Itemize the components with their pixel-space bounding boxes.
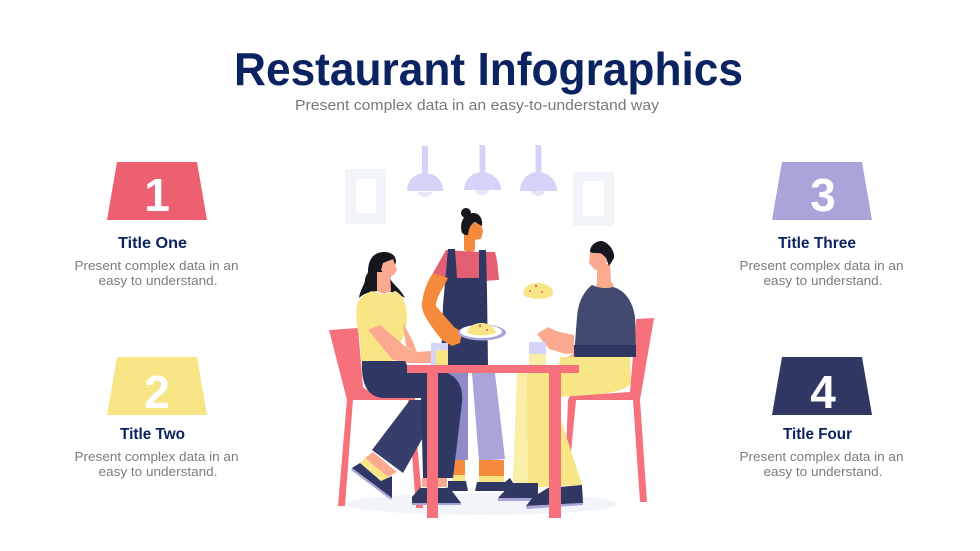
- badge: number 2: 2: [144, 366, 170, 418]
- badge: number 4: 4: [810, 366, 836, 418]
- text: description three: Present complex data in an: [740, 258, 904, 273]
- text: description one: easy to understand.: [98, 273, 218, 288]
- heading: title four: Title Four: [783, 426, 852, 443]
- waitress apron: [441, 249, 488, 366]
- icon: right wall frame: [573, 172, 614, 226]
- man arm: [537, 327, 574, 354]
- man head and neck: [596, 264, 614, 292]
- man legs: [513, 372, 582, 487]
- woman back leg: [372, 400, 430, 473]
- panel: item four: [740, 357, 904, 479]
- heading: title one: Title One: [118, 235, 187, 252]
- waitress legs: [447, 373, 468, 460]
- woman: [351, 252, 462, 505]
- woman arm: [368, 325, 443, 363]
- panel: item one: [74, 162, 238, 288]
- man shoes: [498, 483, 538, 498]
- table: [407, 365, 579, 518]
- panel: item three: [740, 162, 904, 288]
- icon: right lamp: [520, 145, 557, 196]
- icon: middle lamp: [464, 145, 501, 195]
- woman shoes: [365, 452, 397, 477]
- woman pants: [362, 361, 462, 478]
- chair: left: [329, 328, 423, 508]
- man: [498, 241, 636, 509]
- badge: number 1: 1: [144, 169, 170, 221]
- woman top: [356, 291, 407, 361]
- badge: number 3: 3: [810, 169, 836, 221]
- badge: number 2: [107, 357, 207, 418]
- woman face and neck: [377, 272, 391, 294]
- text: description two: Present complex data in an: [74, 449, 238, 464]
- panel: item two: [74, 357, 238, 479]
- heading: title three: Title Three: [778, 235, 856, 252]
- text: description four: easy to understand.: [764, 464, 882, 479]
- waitress shirt: [433, 250, 499, 285]
- chair: right: [566, 318, 654, 502]
- subtitle: Present complex data in an easy-to-understand way: [295, 98, 660, 114]
- plate in hand: [458, 323, 506, 340]
- waitress neck and head: [464, 234, 475, 252]
- illustration: restaurant scene: [329, 145, 654, 518]
- woman hair: [359, 252, 405, 298]
- text: description two: easy to understand.: [98, 464, 218, 479]
- text: description four: Present complex data in an: [740, 449, 904, 464]
- text: description three: easy to understand.: [764, 273, 882, 288]
- waitress arm: [422, 273, 462, 346]
- heading: title two: Title Two: [120, 426, 185, 443]
- icon: left wall frame: [345, 169, 386, 224]
- badge: number 4: [772, 357, 872, 418]
- floor shadow: [346, 493, 618, 515]
- glass: man: [529, 342, 546, 365]
- glass: woman: [431, 343, 448, 365]
- text: description one: Present complex data in an: [74, 258, 238, 273]
- man sweater: [574, 285, 636, 356]
- waitress: [422, 208, 515, 491]
- icon: left lamp: [407, 146, 443, 197]
- title: Restaurant Infographics: [234, 43, 743, 95]
- floating pasta dish: [523, 283, 553, 299]
- man thigh: [560, 357, 631, 397]
- badge: number 1: [107, 162, 207, 221]
- badge: number 3: [772, 162, 872, 221]
